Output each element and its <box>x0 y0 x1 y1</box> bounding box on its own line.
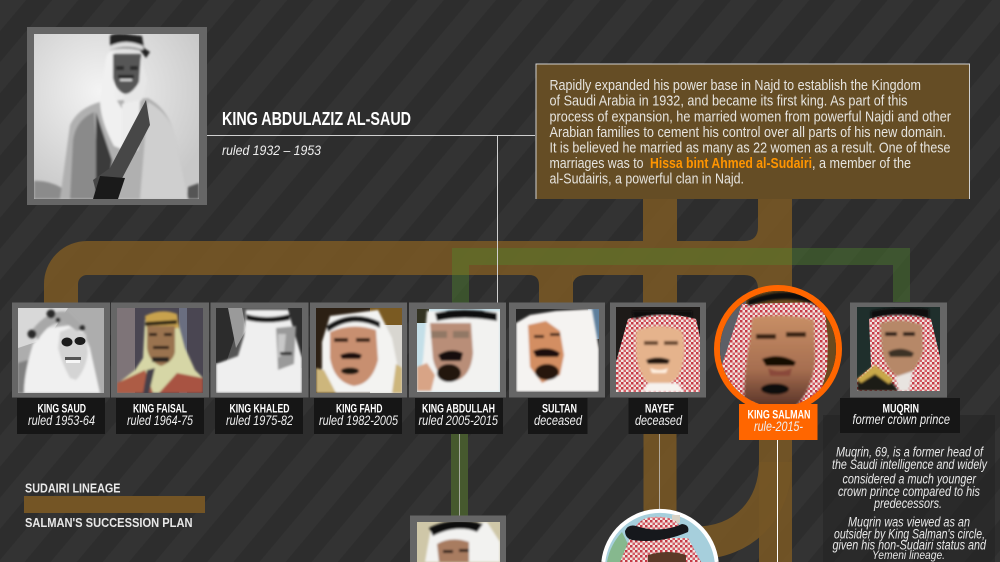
label: King Salman <box>739 404 818 440</box>
portrait: Sultan <box>509 302 605 398</box>
label: King Abdullah: ruled 2005-2015 <box>418 413 498 428</box>
label: King Abdullah <box>415 398 503 434</box>
label: Nayef <box>628 398 688 434</box>
legend: SUDAIRI LINEAGE <box>25 480 121 496</box>
portrait: King Faisal <box>111 302 209 398</box>
title: King Abdulaziz Al-Saud: KING ABDULAZIZ AL-SAUD <box>222 109 411 129</box>
portrait: lower centre successor <box>603 511 717 562</box>
reign dates: King Abdulaziz: ruled 1932 – 1953 <box>222 142 321 158</box>
label: Sultan: deceased <box>534 413 582 428</box>
panel: Muqrin biography: Yemeni lineage. <box>872 550 945 562</box>
connector lines <box>199 136 778 562</box>
panel: Muqrin biography: Muqrin was viewed as an <box>848 514 970 530</box>
label: King Saud <box>17 398 105 434</box>
portrait: Nayef <box>610 302 706 398</box>
label: King Faisal: ruled 1964-75 <box>127 413 193 428</box>
panel: Abdulaziz biography <box>536 64 970 199</box>
portrait: King Abdulaziz <box>27 27 207 205</box>
label: Nayef: NAYEF <box>645 402 674 416</box>
panel: Abdulaziz biography: of Saudi Arabia in 1932, and became its first king. As part of this <box>550 92 908 110</box>
brown Sudairi lineage track <box>61 199 792 562</box>
panel: Muqrin biography <box>823 415 995 562</box>
label: King Khaled: ruled 1975-82 <box>226 413 293 428</box>
portrait: King Salman, highlighted <box>716 287 840 411</box>
label: Sultan: SULTAN <box>542 402 577 416</box>
label: King Fahd: ruled 1982-2005 <box>319 413 398 428</box>
portrait: King Saud <box>12 302 110 398</box>
legend: SALMAN'S SUCCESSION PLAN <box>25 515 192 530</box>
label: King Salman: KING SALMAN <box>748 408 810 422</box>
label: King Fahd <box>314 398 402 434</box>
portrait: King Khaled <box>210 302 308 398</box>
panel: Abdulaziz biography: marriages was to <box>550 155 644 172</box>
panel: Muqrin biography: predecessors. <box>873 496 942 511</box>
panel: Abdulaziz biography: Rapidly expanded his power base in Najd to establish the Kingdom <box>550 77 921 94</box>
panel: Abdulaziz biography: Hissa bint Ahmed al-Sudairi <box>650 155 812 172</box>
label: Nayef: deceased <box>635 413 682 428</box>
label: King Faisal: KING FAISAL <box>133 402 187 416</box>
label: Muqrin: MUQRIN <box>882 402 919 416</box>
portrait: King Fahd <box>310 302 407 398</box>
label: Muqrin <box>840 398 960 433</box>
label: Sultan <box>528 398 588 434</box>
panel: Abdulaziz biography: al-Sudairis, a powerful clan in Najd. <box>550 170 744 188</box>
label: King Saud: ruled 1953-64 <box>28 413 95 428</box>
panel: Abdulaziz biography: , a member of the <box>812 155 911 172</box>
label: King Faisal <box>116 398 204 434</box>
label: King Saud: KING SAUD <box>38 402 86 416</box>
label: Muqrin: former crown prince <box>852 412 950 427</box>
green succession plan track <box>460 256 902 516</box>
portrait: King Abdullah <box>409 302 506 398</box>
label: King Fahd: KING FAHD <box>336 402 383 416</box>
legend <box>24 480 205 530</box>
portrait: Muqrin <box>850 302 947 398</box>
label: King Abdullah: KING ABDULLAH <box>422 402 495 416</box>
label: King Salman: rule-2015- <box>754 419 803 434</box>
label: King Khaled: KING KHALED <box>230 402 290 416</box>
portrait: lower left successor <box>410 516 506 562</box>
label: King Khaled <box>215 398 303 434</box>
